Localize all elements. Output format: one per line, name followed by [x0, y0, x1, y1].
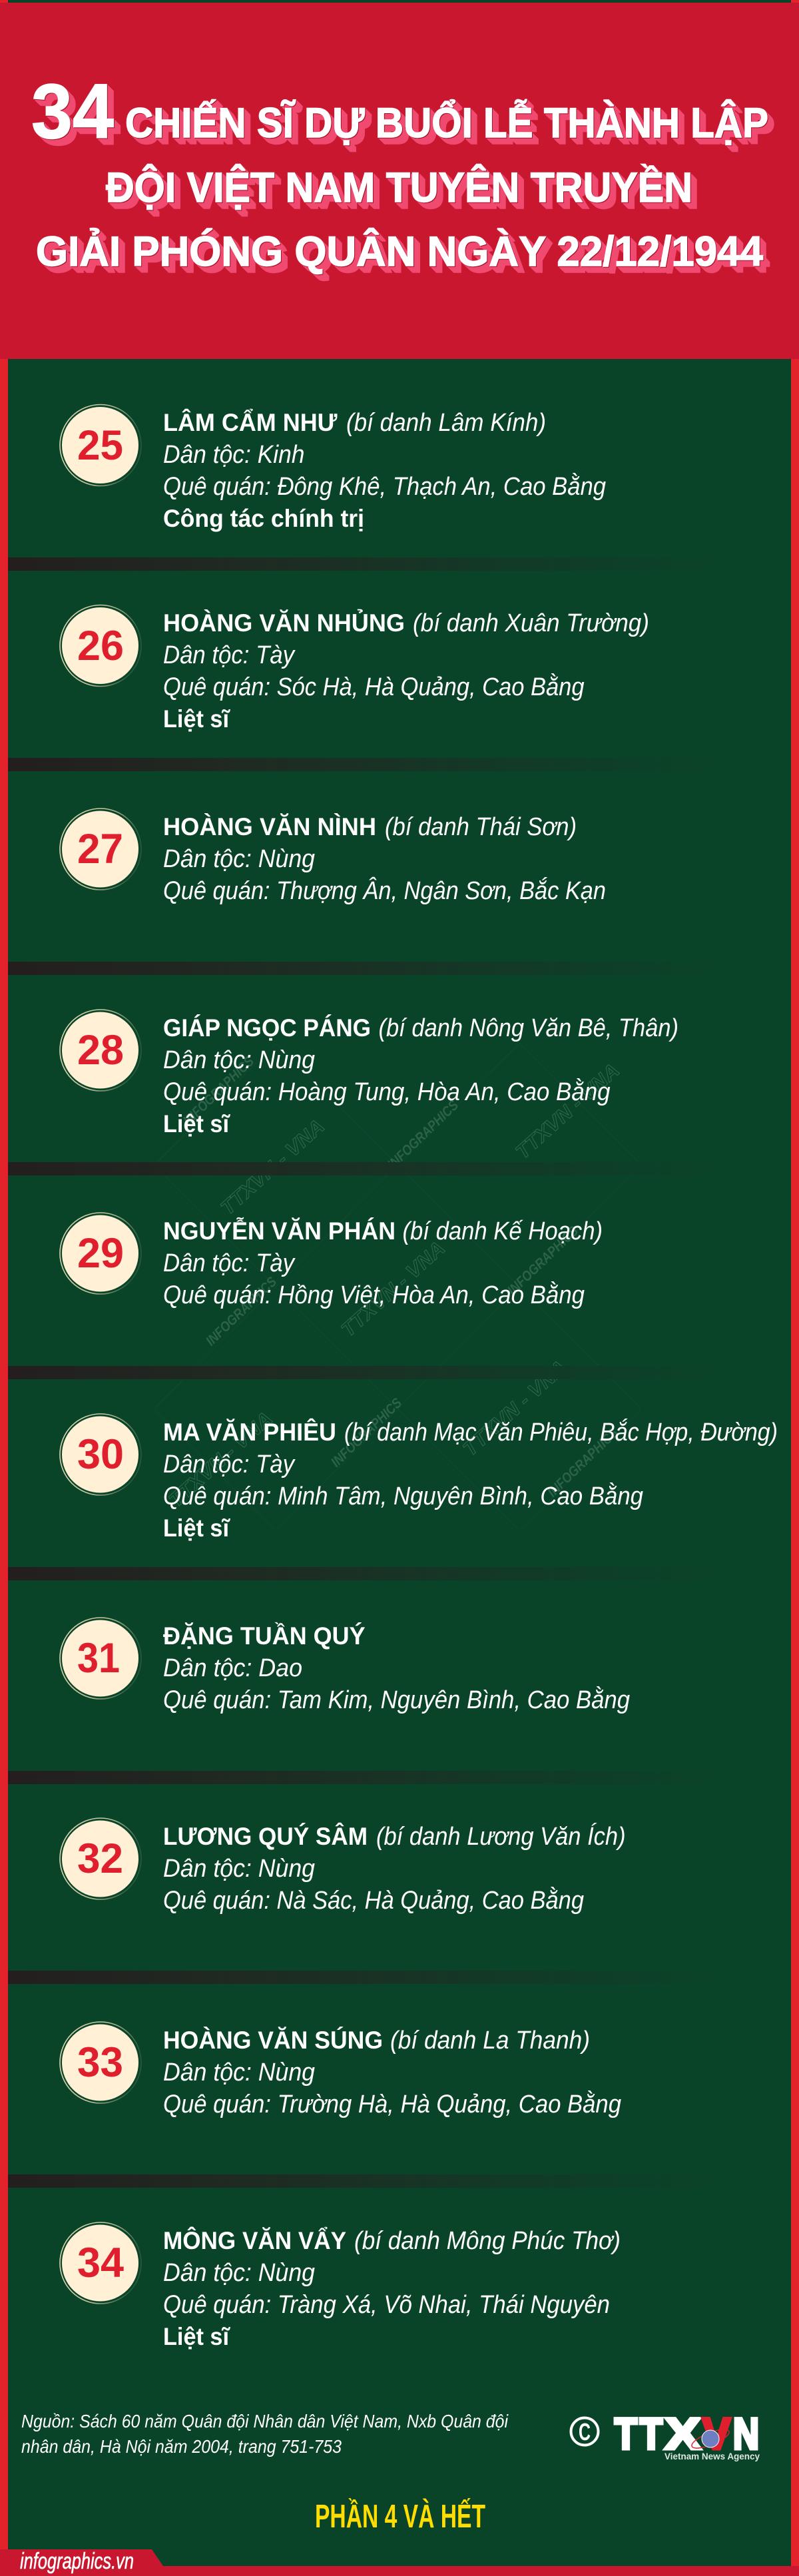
panel: entry 29 [60, 1213, 603, 1309]
logo: TTXVN copyright: T [640, 2409, 663, 2458]
note 25: Công tác chính trị [163, 505, 364, 532]
alias 33: (bí danh La Thanh) [390, 2027, 590, 2055]
ethnicity 33: Dân tộc: Nùng [163, 2059, 315, 2087]
alias 34: (bí danh Mông Phúc Thơ) [354, 2227, 621, 2255]
hometown 26: Quê quán: Sóc Hà, Hà Quảng, Cao Bằng [163, 673, 585, 701]
panel: entry 26 [60, 605, 649, 733]
header panel [0, 3, 799, 359]
name 27: HOÀNG VĂN NÌNH [163, 813, 376, 840]
watermark: INFOGRAPHICS [180, 1054, 257, 1129]
hometown 30: Quê quán: Minh Tâm, Nguyên Bình, Cao Bằng [163, 1482, 643, 1510]
watermark: INFOGRAPHICS [328, 1395, 405, 1470]
number badge 25: 25 [77, 422, 123, 469]
panel: entry 30 [60, 1414, 778, 1542]
number badge 29 [60, 1213, 141, 1294]
number badge 31 [60, 1618, 141, 1699]
watermark: INFOGRAPHICS [203, 1274, 280, 1349]
number badge 33 [60, 2022, 141, 2103]
number badge 25 [60, 405, 141, 486]
name 33: HOÀNG VĂN SÚNG [163, 2026, 383, 2054]
alias 27: (bí danh Thái Sơn) [385, 813, 577, 841]
source note: nhân dân, Hà Nội năm 2004, trang 751-753 [21, 2436, 342, 2457]
number badge 27: 27 [77, 826, 123, 872]
logo: TTXVN copyright: V [702, 2409, 730, 2458]
hometown 29: Quê quán: Hồng Việt, Hòa An, Cao Bằng [163, 1281, 585, 1309]
panel: entry 31 [60, 1618, 630, 1714]
watermark: TTXVN - VNA [216, 1116, 329, 1219]
name 30: MA VĂN PHIÊU [163, 1418, 336, 1446]
title [31, 68, 768, 275]
number badge 30 [60, 1414, 141, 1495]
hometown 28: Quê quán: Hoàng Tung, Hòa An, Cao Bằng [163, 1078, 611, 1106]
watermark: TTXVN - VNA [511, 1060, 624, 1163]
panel: entry 33 [60, 2022, 621, 2118]
watermark: TTXVN - VNA [337, 1237, 449, 1341]
hometown 25: Quê quán: Đông Khê, Thạch An, Cao Bằng [163, 472, 606, 501]
top strip [8, 0, 791, 3]
ethnicity 34: Dân tộc: Nùng [163, 2259, 315, 2287]
logo: TTXVN copyright: Vietnam News Agency [665, 2451, 760, 2461]
watermark: TTXVN - VNA [459, 1357, 571, 1460]
alias 26: (bí danh Xuân Trường) [413, 609, 649, 637]
name 31: ĐẶNG TUẦN QUÝ [163, 1622, 366, 1650]
source note: Nguồn: Sách 60 năm Quân đội Nhân dân Việt Nam, Nxb Quân đội [21, 2411, 509, 2431]
ethnicity 32: Dân tộc: Nùng [163, 1855, 315, 1883]
logo: TTXVN copyright: C [579, 2418, 591, 2445]
note 30: Liệt sĩ [163, 1514, 231, 1542]
note 28: Liệt sĩ [163, 1110, 231, 1137]
title: ĐỘI VIỆT NAM TUYÊN TRUYỀN [106, 164, 692, 211]
logo: TTXVN copyright: X [665, 2409, 700, 2458]
title: 34 [31, 68, 114, 155]
logo: TTXVN copyright: T [615, 2409, 637, 2458]
hometown 31: Quê quán: Tam Kim, Nguyên Bình, Cao Bằng [163, 1686, 630, 1714]
name 28: GIÁP NGỌC PÁNG [163, 1014, 371, 1042]
number badge 26 [60, 605, 141, 686]
panel: entry 34 [60, 2222, 621, 2350]
hometown 27: Quê quán: Thượng Ân, Ngân Sơn, Bắc Kạn [163, 876, 606, 905]
part label: PHẦN 4 VÀ HẾT [315, 2499, 485, 2535]
bottom red band [0, 2566, 799, 2576]
number badge 28 [60, 1010, 141, 1091]
hometown 33: Quê quán: Trường Hà, Hà Quảng, Cao Bằng [163, 2090, 621, 2118]
watermark [168, 1056, 621, 1506]
alias 28: (bí danh Nông Văn Bê, Thân) [378, 1014, 678, 1042]
number badge 30: 30 [77, 1431, 124, 1478]
ethnicity 31: Dân tộc: Dao [163, 1654, 302, 1682]
panel: entry 32 [60, 1818, 626, 1915]
number badge 29: 29 [77, 1230, 124, 1277]
ethnicity 30: Dân tộc: Tày [163, 1450, 296, 1478]
ethnicity 25: Dân tộc: Kinh [163, 441, 305, 469]
panel: entry 28 [60, 1010, 678, 1137]
number badge 32: 32 [77, 1835, 123, 1882]
title: CHIẾN SĨ DỰ BUỔI LỄ THÀNH LẬP [125, 99, 768, 147]
number badge 32 [60, 1818, 141, 1899]
number badge 26: 26 [77, 623, 124, 669]
hometown 34: Quê quán: Tràng Xá, Võ Nhai, Thái Nguyên [163, 2291, 610, 2319]
alias 25: (bí danh Lâm Kính) [346, 409, 546, 437]
panel: entry 25 [60, 405, 606, 532]
number badge 34: 34 [77, 2240, 124, 2286]
watermark: INFOGRAPHICS [505, 1223, 581, 1299]
ethnicity 29: Dân tộc: Tày [163, 1249, 296, 1277]
name 34: MÔNG VĂN VẨY [163, 2226, 346, 2254]
site tab: infographics.vn [20, 2549, 134, 2574]
logo: TTXVN copyright [571, 2409, 760, 2461]
title: GIẢI PHÓNG QUÂN NGÀY 22/12/1944 [36, 228, 763, 275]
watermark: INFOGRAPHICS [545, 1425, 621, 1500]
number badge 33: 33 [77, 2039, 123, 2086]
alias 29: (bí danh Kế Hoạch) [402, 1217, 603, 1245]
alias 32: (bí danh Lương Văn Ích) [376, 1822, 626, 1851]
number badge 31: 31 [77, 1635, 120, 1682]
note 26: Liệt sĩ [163, 705, 231, 733]
source note [21, 2411, 509, 2457]
number badge 27 [60, 808, 141, 890]
number badge 34 [60, 2222, 141, 2304]
ethnicity 26: Dân tộc: Tày [163, 641, 296, 669]
name 26: HOÀNG VĂN NHỦNG [163, 609, 405, 637]
name 25: LÂM CẨM NHƯ [163, 408, 338, 436]
note 34: Liệt sĩ [163, 2323, 231, 2350]
ethnicity 27: Dân tộc: Nùng [163, 845, 315, 873]
number badge 28: 28 [77, 1027, 124, 1074]
logo: TTXVN copyright: N [733, 2409, 759, 2458]
ethnicity 28: Dân tộc: Nùng [163, 1046, 315, 1074]
name 29: NGUYỄN VĂN PHÁN [163, 1217, 396, 1245]
watermark: INFOGRAPHICS [385, 1098, 461, 1173]
watermark: TTXVN - VNA [164, 1408, 277, 1512]
hometown 32: Quê quán: Nà Sác, Hà Quảng, Cao Bằng [163, 1886, 584, 1915]
name 32: LƯƠNG QUÝ SÂM [163, 1822, 368, 1850]
panel: entry 27 [60, 808, 606, 905]
